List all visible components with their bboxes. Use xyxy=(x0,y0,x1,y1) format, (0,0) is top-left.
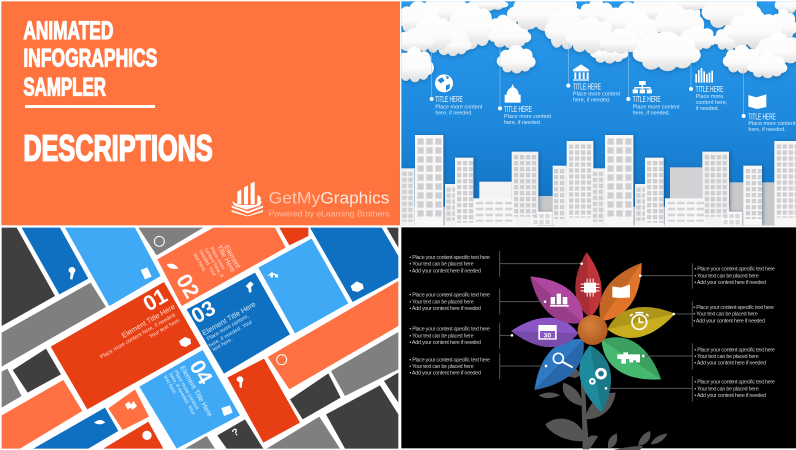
leader dots xyxy=(511,262,675,390)
icon: calendar: 30 xyxy=(544,332,551,339)
panel: paper city and clouds xyxy=(395,0,796,226)
tile 02: content here, if xyxy=(203,247,225,279)
callouts: TITLE HERE xyxy=(633,94,661,104)
tile 02 xyxy=(157,228,286,306)
left text blocks: • Place your content-specific text here xyxy=(409,255,490,261)
icon: globe xyxy=(435,74,453,92)
right text blocks: • Add your content here if needed xyxy=(693,318,765,324)
right text blocks: • Place your content-specific text here xyxy=(693,305,774,311)
clouds xyxy=(395,0,796,82)
icon: bar chart xyxy=(695,68,713,83)
flower centre xyxy=(578,315,608,345)
right text blocks: • Add your content here if needed xyxy=(694,361,766,367)
left text blocks: • Add your content here if needed xyxy=(409,268,481,274)
right text blocks: • Your text can be placed here xyxy=(693,312,758,318)
callouts: Place more content xyxy=(435,104,483,110)
left text blocks: • Place your content-specific text here xyxy=(409,327,490,333)
left text blocks: • Your text can be placed here xyxy=(409,299,474,305)
callouts: Place more content xyxy=(573,91,621,97)
right text blocks: • Place your content-specific text here xyxy=(694,267,775,273)
callouts: Place more content xyxy=(748,121,796,127)
left text blocks: • Your text can be placed here xyxy=(409,262,474,268)
tile 04: text here. xyxy=(162,375,178,396)
left text blocks: • Add your content here if needed xyxy=(409,306,481,312)
left text blocks: • Add your content here if needed xyxy=(409,340,481,346)
callouts: content here, xyxy=(696,100,727,106)
icon: GetMyGraphics logo xyxy=(232,182,263,216)
icon: puzzle xyxy=(617,352,640,364)
callouts: here, if needed. xyxy=(573,97,610,103)
right text blocks: • Place your content-specific text here xyxy=(694,380,775,386)
leader lines xyxy=(500,251,692,402)
flower petals xyxy=(511,251,678,415)
right text blocks xyxy=(693,267,775,399)
right text blocks: • Your text can be placed here xyxy=(694,386,759,392)
logo wordmark xyxy=(269,188,389,219)
tile 04: 04 xyxy=(185,356,217,388)
icon: bars xyxy=(550,294,569,307)
tile 02: Element xyxy=(222,244,241,270)
logo wordmark: Powered by eLearning Brothers xyxy=(269,209,389,219)
callouts: TITLE HERE xyxy=(573,81,601,91)
right text blocks: • Add your content here if needed xyxy=(694,393,766,399)
right text blocks: • Place your content-specific text here xyxy=(694,347,775,353)
icon: capitol xyxy=(505,84,521,103)
tile 02: Title Here xyxy=(215,244,236,274)
tile 01: Your text here. xyxy=(148,317,182,340)
plant stem and leaves xyxy=(539,359,667,450)
icon: bank xyxy=(573,64,589,81)
icon: magnifier xyxy=(553,353,573,367)
tile 04: Element Title Here xyxy=(178,365,213,418)
icon: book xyxy=(612,285,630,298)
logo wordmark: GetMy xyxy=(269,188,321,207)
callouts: here, if needed. xyxy=(435,110,473,116)
tile 03: Element Title Here xyxy=(200,299,257,337)
callouts: TITLE HERE xyxy=(435,94,463,104)
callouts: here, if needed. xyxy=(633,110,670,116)
right text blocks: • Your text can be placed here xyxy=(694,354,759,360)
right text blocks: • Add your content here if needed xyxy=(694,280,766,286)
title: animated infographics sampler: INFOGRAPHICS xyxy=(23,45,157,73)
callouts: here, if needed. xyxy=(504,120,541,126)
tile 02: needed. Your xyxy=(197,249,217,278)
callouts: TITLE HERE xyxy=(696,84,723,94)
tile 03: 03 xyxy=(187,296,220,328)
icon: open book xyxy=(748,94,766,109)
left text blocks xyxy=(409,255,490,377)
panel: rotated tiles xyxy=(0,226,400,450)
tile 02: text here. xyxy=(192,252,207,273)
connector lines xyxy=(432,43,744,116)
callouts: Place more xyxy=(696,94,723,100)
icon: alarm clock xyxy=(630,313,649,329)
right text blocks: • Your text can be placed here xyxy=(694,273,759,279)
callouts: Place more content xyxy=(504,114,552,120)
left text blocks: • Place your content-specific text here xyxy=(409,357,490,363)
tile icons xyxy=(69,236,364,440)
icon: calendar xyxy=(538,325,557,340)
title: animated infographics sampler: ANIMATED xyxy=(23,17,113,45)
callouts: if needed. xyxy=(696,106,719,112)
logo wordmark: Graphics xyxy=(320,188,389,207)
tile 04 xyxy=(139,350,240,449)
tile 04: Place more content xyxy=(172,369,200,411)
tile 01: Element Title Here xyxy=(120,302,177,340)
tile 01: Place more content here, if needed. xyxy=(99,312,178,361)
icon: gears xyxy=(590,369,605,384)
panel: flower infographic xyxy=(401,227,796,450)
icon: org chart xyxy=(633,81,652,93)
panel: orange title card xyxy=(1,1,400,225)
tile 03: text here. xyxy=(212,337,234,353)
left text blocks: • Your text can be placed here xyxy=(409,364,474,370)
title: animated infographics sampler: SAMPLER xyxy=(23,73,106,101)
left text blocks: • Your text can be placed here xyxy=(409,333,474,339)
tile 03 xyxy=(187,273,290,374)
callouts: TITLE HERE xyxy=(504,104,532,114)
tile 02: 02 xyxy=(171,270,204,302)
buildings xyxy=(401,135,796,226)
left text blocks: • Add your content here if needed xyxy=(409,371,481,377)
tile 03: here, if needed. Your xyxy=(208,319,254,349)
tile 01: 01 xyxy=(139,283,172,316)
tile 02: Place more xyxy=(208,246,226,271)
heading: descriptions: DESCRIPTIONS xyxy=(23,128,213,169)
tile 03: Place more content, xyxy=(206,314,250,342)
callouts: Place more content xyxy=(633,104,680,110)
icon: chip xyxy=(581,279,599,297)
tile 04: here, if needed. Your xyxy=(167,372,196,416)
title: animated infographics sampler xyxy=(23,17,157,101)
callouts xyxy=(430,81,796,133)
left text blocks: • Place your content-specific text here xyxy=(409,293,490,299)
tile 01 xyxy=(51,282,201,409)
callouts: here, if needed. xyxy=(748,127,786,133)
tile icons: ? xyxy=(230,427,241,439)
